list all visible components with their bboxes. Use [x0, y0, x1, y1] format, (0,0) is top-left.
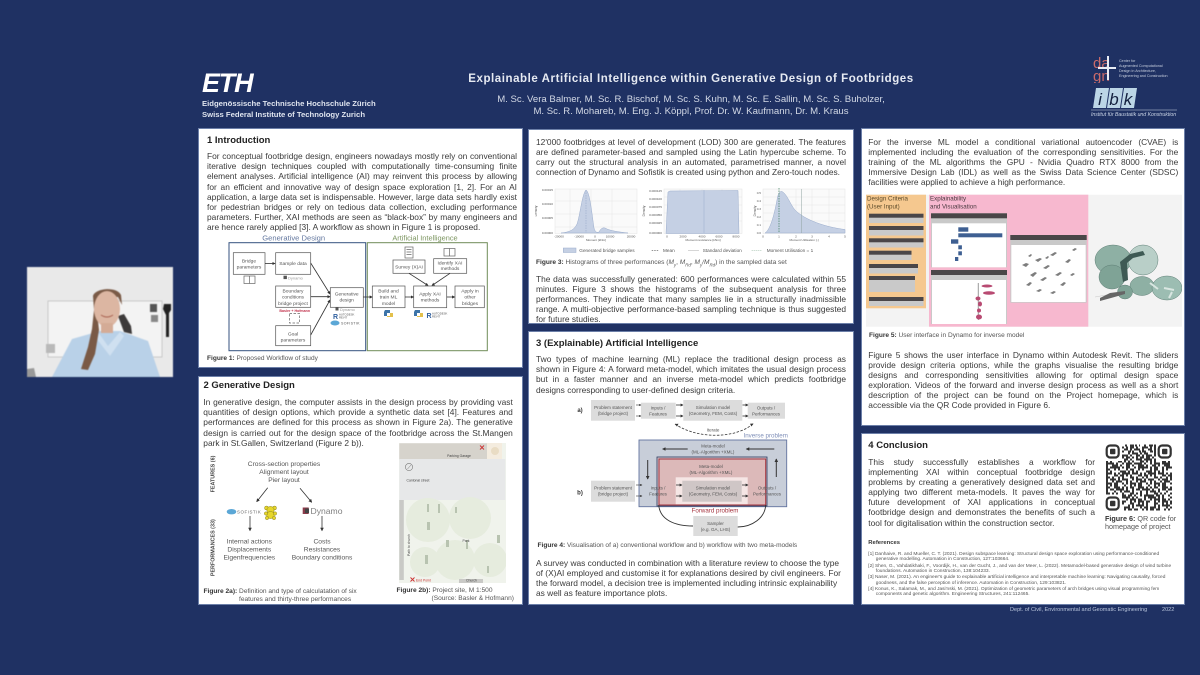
text: conclusion body	[868, 457, 1096, 528]
figure 4: conventional workflow and two meta-model workflow: (ML-Algorithm +XML)	[690, 470, 733, 475]
figure 4: conventional workflow and two meta-model workflow: Features	[649, 492, 668, 496]
text: user interface description: designs and corresponding sensitivities allowing for optimal design space	[868, 370, 1178, 380]
webcam video of presenter	[26, 266, 174, 378]
figure 1: proposed workflow diagram: REVIT	[432, 314, 441, 318]
figure 4: conventional workflow and two meta-model workflow: Problem statement	[594, 405, 633, 410]
figure 3: three performance histograms: Generated bridge samples	[579, 248, 635, 253]
figure 1: proposed workflow diagram: bridges	[462, 301, 479, 307]
figure 2a: features and performances diagram: Alignment layout	[259, 469, 309, 476]
figure 2b: project site map	[399, 443, 506, 583]
caption: figure 6: homepage of project	[1105, 522, 1171, 531]
figure 3: three performance histograms: Moment Utilisation = 1	[767, 248, 814, 253]
caption: figure 2a	[204, 588, 357, 602]
figure 3: three performance histograms: 0	[666, 234, 668, 238]
header: ETH logo: Eidgenössische Technische Hochschule Zürich	[202, 99, 376, 108]
figure 3: three performance histograms: 0.000125	[649, 189, 662, 193]
figure 2a: features and performances diagram: Cross-section properties	[248, 461, 321, 468]
figure 2a: features and performances diagram: Internal actions	[227, 538, 273, 546]
figure 3: three performance histograms: 20000	[627, 234, 636, 238]
text: inverse model	[868, 137, 1178, 187]
figure 4: conventional workflow and two meta-model workflow: Inverse problem	[744, 432, 788, 440]
figure 1: proposed workflow diagram: Generative Design	[262, 234, 325, 242]
figure 3: three performance histograms: 0	[762, 234, 764, 238]
panel: design criteria sliders: (User Input)	[867, 204, 900, 210]
heading: conclusion: 4 Conclusion	[868, 440, 928, 450]
figure 2a: features and performances diagram: Dynamo	[310, 506, 343, 516]
text: introduction body: are hence rarely applied [3]. A workflow as shown in Figure 1 is proposed.	[207, 222, 480, 232]
text: data generation intro: carry out the structural analysis in an automated, parametrised manner, a novel	[536, 157, 846, 167]
figure 4: conventional workflow and two meta-model workflow	[577, 400, 788, 536]
figure 3: three performance histograms: 0.00010	[542, 202, 553, 206]
figure 1: proposed workflow diagram: Build and	[378, 288, 399, 294]
figure 1: proposed workflow diagram: train ML	[380, 294, 398, 300]
figure 4: conventional workflow and two meta-model workflow: Inputs /	[651, 406, 666, 410]
references: foundations. Automation in Construction, 138:104233.	[876, 569, 990, 574]
text: generative design body: In generative design, the computer assists in the design process by providing vast	[203, 397, 513, 407]
figure 1: proposed workflow diagram: parameters	[281, 338, 306, 344]
text: explainable AI body: designs corresponding to user-defined design criteria.	[536, 385, 735, 395]
figure 3: three performance histograms: 10000	[606, 234, 615, 238]
figure 1: proposed workflow diagram: Identify XAI	[437, 260, 463, 266]
text: survey and decision tree	[536, 558, 841, 598]
figure 4: conventional workflow and two meta-model workflow: Outputs /	[758, 486, 777, 490]
figure 1: proposed workflow diagram: Goal	[288, 332, 298, 338]
header: ETH logo: Swiss Federal Institute of Technology Zurich	[202, 110, 365, 119]
figure 4: conventional workflow and two meta-model workflow: Forward problem	[692, 508, 738, 514]
figure 2b: project site map: Path to church	[407, 534, 411, 556]
figure 3: three performance histograms	[535, 188, 846, 253]
text: data generation results: The data was successfully generated: 600 performances were calculated within 55	[536, 274, 846, 284]
figure 1: proposed workflow diagram: other	[464, 294, 476, 300]
logo: DACS centre: Center for	[1119, 59, 1135, 63]
text: user interface description: exploration. Videos of the forward and inverse design process as well as a short	[868, 380, 1178, 390]
panel: inverse model and user interface	[862, 129, 1184, 425]
panel: design criteria sliders	[866, 195, 926, 308]
text: conclusion body: applying two different meta-models. It paves the way for	[868, 487, 1095, 497]
text: survey and decision tree: the forward model, a decision tree is implemented including intrinsic explainability	[536, 578, 837, 588]
text: introduction body	[207, 151, 517, 232]
figure 3: three performance histograms: 0.2	[757, 215, 761, 219]
caption: figure 2b: (Source: Basler & Hofmann)	[432, 594, 514, 602]
figure 4: conventional workflow and two meta-model workflow: Outputs /	[757, 406, 776, 410]
text: introduction body: application, a large data set is indispensable. However, large data sets hardly exist	[207, 192, 517, 202]
caption: figure 2b: Figure 2b): Project site, M 1:500	[396, 586, 493, 594]
logo: DACS centre: da	[1093, 55, 1110, 72]
text: data generation intro	[536, 137, 846, 177]
figure 2a: features and performances diagram: Boundary conditions	[292, 554, 353, 562]
panel: design criteria sliders: Design Criteria	[867, 196, 908, 202]
references: [3] Naser, M. (2021). An engineer's guide to explainable artificial intelligence and interpretable machine learning: Navigating causality, forced	[868, 575, 1165, 580]
figure 5: Dynamo user interface	[866, 194, 1182, 327]
figure 3: three performance histograms: Moment [kNm]	[586, 238, 606, 242]
text: generative design body: quantities of design options, which provide a synthetic data set [4]. Features and	[203, 407, 513, 417]
logo: DACS centre	[1093, 55, 1168, 83]
text: conclusion body: footbridge design and demonstrates the benefits of such a	[868, 507, 1095, 517]
panel: explainability and visualisation: and Visualisation	[930, 204, 977, 210]
figure 1: proposed workflow diagram: Boundary	[283, 288, 304, 294]
text: data generation results: for future studies.	[536, 314, 601, 324]
logo: DACS centre: Design in Architecture,	[1119, 69, 1156, 73]
references: components and genetic algorithm. Engineering Structures, 241:112465.	[876, 592, 1030, 597]
panel: introduction	[199, 129, 522, 367]
figure 1: proposed workflow diagram: AUTODESK	[432, 312, 447, 316]
text: introduction body: for an efficient and innovative way of design space exploration [1, 2]. For an AI	[207, 182, 517, 192]
text: survey and decision tree: as well as feature importance plots.	[536, 588, 667, 598]
references: [2] Shen, G., Vahdatikhaki, F., Voordijk, H., van der Gucht, J., and van der Meer, L. (2022). Metamodel-based generative design of wind turbine	[868, 564, 1171, 568]
figure 4: conventional workflow and two meta-model workflow: Performances	[752, 412, 781, 416]
text: conclusion body: This study successfully establishes a workflow for	[868, 457, 1095, 467]
panel: generative design	[199, 377, 522, 604]
figure 4: conventional workflow and two meta-model workflow: Problem statement	[594, 486, 633, 490]
logo: DACS centre: Augmented Computational	[1119, 64, 1163, 68]
text: inverse model: facilities were applied to achieve a high performance.	[868, 177, 1065, 187]
text: conclusion body: implementing XAI within conceptual footbridge design	[868, 467, 1095, 477]
text: user interface description: accessible via the QR Code provided in Figure 6.	[868, 400, 1050, 410]
caption: figure 3: Figure 3: Histograms of three performances (My, MRd, My/MRd) in the sampled data set	[536, 259, 787, 268]
text: data generation intro: 12'000 footbridges at level of development (LOD) 300 are generated. The features	[536, 137, 846, 147]
text: conclusion body: future development of XAI applications in conceptual	[868, 497, 1095, 507]
caption: figure 6	[1105, 514, 1176, 531]
figure 3: three performance histograms: 6000	[716, 234, 723, 238]
figure 4: conventional workflow and two meta-model workflow: (bridge project)	[598, 411, 629, 416]
figure 2b: project site map: End Point	[416, 578, 431, 582]
caption: figure 4: Figure 4: Visualisation of a) conventional workflow and b) workflow with two meta-models	[538, 542, 797, 549]
figure 3: three performance histograms: Moment Utilisation [-]	[789, 238, 819, 242]
figure 2b: project site map: Cantonal street	[406, 478, 430, 482]
figure 4: conventional workflow and two meta-model workflow: (Geometry, FEM, Costs)	[689, 492, 738, 496]
figure 3: three performance histograms: -10000	[574, 234, 584, 238]
figure 3: three performance histograms: 3	[811, 234, 813, 238]
figure 3: three performance histograms: -20000	[554, 234, 564, 238]
figure 2a: features and performances diagram: SOFISTIK	[237, 510, 261, 514]
header: ETH logo: ETH	[202, 68, 252, 98]
text: conclusion body: tool for digitalisation within the construction sector.	[868, 518, 1055, 528]
text: data generation intro: connection of Dynamo and Sofistik is created using python and Zero-touch nodes.	[536, 167, 840, 177]
figure 3: three performance histograms: 0.00000	[542, 231, 553, 235]
figure 1: proposed workflow diagram: Survey (X)AI	[395, 264, 423, 270]
text: introduction body: iterative design techniques coupled with computationally time-consuming finite	[207, 161, 517, 171]
figure 1: proposed workflow diagram: Apply in	[461, 288, 479, 294]
figure 3: three performance histograms: 0.000075	[649, 205, 662, 209]
figure 4: conventional workflow and two meta-model workflow: (Geometry, FEM, Costs)	[689, 411, 738, 416]
text: inverse model: implemented including the evaluation of the corresponding sensitivities. For the	[868, 147, 1178, 157]
caption: figure 1: Figure 1: Proposed Workflow of study	[207, 355, 318, 362]
figure 2b: project site map: Park	[463, 539, 470, 543]
figure 3: three performance histograms: Density	[753, 205, 757, 216]
references: generative modelling. Automation in Construction, 127:103664.	[876, 557, 1009, 562]
figure 4: conventional workflow and two meta-model workflow: Inputs /	[651, 486, 666, 490]
figure 2a: features and performances diagram: Pier layout	[268, 477, 300, 484]
figure 4: conventional workflow and two meta-model workflow: Iterate	[707, 428, 720, 432]
figure 1: proposed workflow diagram: SOFISTIK	[341, 321, 360, 325]
figure 3: three performance histograms: 0.000050	[649, 213, 662, 217]
figure 2a: features and performances diagram: Resistances	[304, 546, 341, 554]
figure 3: three performance histograms: 8000	[733, 234, 740, 238]
figure 2a: features and performances diagram: Displacements	[227, 546, 272, 554]
text: data generation results: range. A multi-objective performance-based sampling technique is thus suggested	[536, 304, 846, 314]
text: user interface description: provide design criteria options, while the graphs visualise the resulting bridge	[868, 360, 1178, 370]
figure 2b: project site map: Parking Garage	[447, 454, 471, 458]
figure 1: proposed workflow diagram: methods	[441, 266, 460, 272]
3D footbridge model	[1095, 245, 1182, 301]
figure 1: proposed workflow diagram: Sample data	[279, 261, 307, 267]
figure 4: conventional workflow and two meta-model workflow: Performances	[753, 492, 782, 496]
logo: ibk institute: k	[1124, 90, 1134, 109]
text: introduction body: for pedestrian bridges or rely on tedious data collection, excluding performance	[207, 202, 517, 212]
figure 2a: features and performances diagram: PERFORMANCES (33)	[210, 519, 216, 576]
figure 2a: features and performances diagram: Costs	[313, 538, 331, 546]
figure 2b: project site map: Church	[466, 578, 477, 582]
figure 3: three performance histograms: 2000	[680, 234, 687, 238]
figure 1: proposed workflow diagram: Bridge	[242, 258, 256, 264]
figure 6: QR code	[1106, 444, 1172, 511]
text: inverse model: For the inverse ML model a conditional variational autoencoder (CVAE) is	[868, 137, 1178, 147]
figure 4: conventional workflow and two meta-model workflow: Simulation model	[696, 486, 730, 490]
panel: data generation and histograms	[529, 130, 853, 323]
figure 3: three performance histograms: Standard deviation	[703, 248, 742, 253]
figure 1: proposed workflow diagram: conditions	[282, 294, 305, 300]
authors: M. Sc. Vera Balmer, M. Sc. R. Bischof, M. Sc. S. Kuhn, M. Sc. E. Sallin, M. Sc. S. Buholzer,	[497, 94, 885, 105]
caption: figure 2a: Figure 2a): Definition and type of calculatation of six	[204, 588, 357, 594]
header: ETH logo	[202, 68, 376, 119]
figure 1: proposed workflow diagram: Dynamo	[340, 307, 356, 312]
references: [1] Danhaive, R. and Mueller, C. T. (2021). Design subspace learning: Structural design space exploration using performance-conditioned	[868, 552, 1159, 556]
caption: figure 2a: features and thirty-three performances	[239, 596, 351, 602]
text: explainable AI body	[536, 354, 846, 395]
figure 1: proposed workflow diagram: methods	[421, 298, 440, 304]
title: Explainable Artificial Intelligence within Generative Design of Footbridges	[468, 72, 914, 84]
figure 1: proposed workflow diagram: bridge project	[278, 301, 308, 307]
text: explainable AI body: Two types of machine learning (ML) replace the traditional design process as	[536, 354, 846, 364]
text: generative design body: park in St.Gallen, Switzerland (Figure 2 b)).	[203, 438, 364, 448]
caption: figure 6: Figure 6: QR code for	[1105, 514, 1176, 523]
figure 3: three performance histograms: 0.4	[757, 199, 761, 203]
logo: ibk institute: Institut für Baustatik und Konstruktion	[1091, 112, 1176, 118]
text: explainable AI body: shown in Figure 4: A forward meta-model, which imitates the usual design process	[536, 364, 846, 374]
figure 3: three performance histograms: 0.000025	[649, 221, 662, 225]
panel: explainability and visualisation	[929, 195, 1088, 327]
figure 3: three performance histograms: 0.3	[757, 207, 761, 211]
text: data generation results: performances. They indicate that many samples lie in a structurally inadmissible	[536, 294, 846, 304]
references: [4] Konus, K., Salamak, M., and Jasi'nski, M. (2021). Optimization of geometric parameters of arch bridges using visual programming fem	[868, 587, 1159, 592]
text: data generation results: minutes. Figure 3 shows the histograms of the subsequent analysis for three	[536, 284, 846, 294]
figure 4: conventional workflow and two meta-model workflow: (bridge project)	[598, 492, 629, 496]
figure 1: proposed workflow diagram: R	[426, 313, 432, 320]
authors	[497, 94, 885, 117]
text: generative design body: performances are defined for this process as shown in Figure 2a). The generative	[203, 417, 513, 427]
heading: explainable AI: 3 (Explainable) Artificial Intelligence	[536, 338, 698, 348]
text: survey and decision tree: of (X)AI employed and customise it for explanations desired by civil engineers. For	[536, 568, 841, 578]
panel: explainable artificial intelligence	[529, 332, 853, 604]
text: introduction body: For conceptual footbridge design, engineers nowadays mostly rely on conventional	[207, 151, 517, 161]
caption: figure 2b	[396, 586, 514, 602]
figure 1: proposed workflow diagram: AUTODESK	[339, 312, 354, 316]
footer: department and year: 2022	[1162, 606, 1174, 612]
logo: DACS centre: Engineering and Construction	[1119, 74, 1168, 78]
figure 4: conventional workflow and two meta-model workflow: (ML-Algorithm +XML)	[692, 450, 735, 454]
figure 3: three performance histograms: 1	[778, 234, 780, 238]
figure 3: three performance histograms: 0.1	[757, 223, 761, 227]
figure 1: proposed workflow diagram: Apply XAI	[419, 292, 441, 298]
figure 3: three performance histograms: 0.0	[757, 231, 761, 235]
text: data generation results	[536, 274, 846, 324]
panel: conclusion	[862, 434, 1184, 604]
figure 1: proposed workflow diagram: REVIT	[339, 316, 348, 320]
text: conclusion body: problems by creating a generatively designed data set and	[868, 477, 1095, 487]
figure 3: three performance histograms: Density	[642, 205, 646, 216]
text: inverse model: training of the ML algorithms the GPU - Nvidia Quadro RTX 8000 from the	[868, 157, 1178, 167]
text: user interface description: description of the project can be found on the Project homepage, which is	[868, 390, 1178, 400]
figure 3: three performance histograms: 0.00015	[542, 188, 553, 192]
figure 4: conventional workflow and two meta-model workflow: b)	[577, 490, 583, 496]
panel: explainability and visualisation: Explainability	[930, 196, 967, 202]
heading: introduction: 1 Introduction	[207, 134, 270, 146]
figure 4: conventional workflow and two meta-model workflow: Meta-model	[701, 444, 725, 448]
text: data generation intro: are defined parameter-based and sampled using the Latin hypercube scheme. To	[536, 147, 846, 157]
figure 4: conventional workflow and two meta-model workflow: (e.g. GA, LHS)	[701, 527, 731, 532]
references: References	[868, 540, 900, 546]
figure 3: three performance histograms: 0.00005	[542, 216, 553, 220]
figure 1: proposed workflow diagram: Artificial Intelligence	[392, 234, 458, 242]
text: introduction body: element analyses. Artificial intelligence (AI) may reinvent this process by allowing	[207, 171, 517, 181]
figure 4: conventional workflow and two meta-model workflow: Simulation model	[696, 405, 730, 410]
figure 4: conventional workflow and two meta-model workflow: a)	[577, 408, 583, 414]
logo: ibk institute: i	[1098, 90, 1103, 109]
figure 3: three performance histograms: 0	[594, 234, 596, 238]
figure 3: three performance histograms: 0.000100	[649, 197, 662, 201]
figure 3: three performance histograms: 4	[828, 234, 830, 238]
figure 3: three performance histograms: Mean	[663, 248, 675, 253]
text: explainable AI body: but in a faster manner and an inverse meta-model which predicts footbridge	[536, 374, 846, 384]
figure 3: three performance histograms: 0.000000	[649, 231, 662, 235]
heading: generative design: 2 Generative Design	[204, 380, 295, 390]
text: introduction body: parameters. Further, XAI methods are seen as “black-box” by many engineers and	[207, 212, 517, 222]
figure 1: proposed workflow diagram	[228, 234, 488, 352]
figure 2a: features and performances diagram: Eigenfrequencies	[223, 554, 276, 562]
references	[868, 540, 1171, 597]
text: generative design body	[203, 397, 513, 448]
authors: M. Sc. R. Mohareb, M. Eng. J. Köppl, Prof. Dr. W. Kaufmann, Dr. M. Kraus	[533, 106, 849, 117]
figure 4: conventional workflow and two meta-model workflow: Meta-model	[699, 464, 723, 469]
footer: department and year: Dept. of Civil, Environmental and Geomatic Engineering	[1010, 606, 1147, 612]
figure 3: three performance histograms: 4000	[699, 234, 706, 238]
figure 3: three performance histograms: 2	[795, 234, 797, 238]
figure 3: three performance histograms: 5	[844, 234, 846, 238]
figure 1: proposed workflow diagram: Generative	[335, 292, 359, 298]
logo: ibk institute	[1091, 88, 1177, 118]
figure 1: proposed workflow diagram: parameters	[237, 264, 262, 270]
figure 4: conventional workflow and two meta-model workflow: Features	[649, 412, 668, 416]
figure 1: proposed workflow diagram: model	[382, 301, 395, 307]
figure 2a: features and performances diagram: FEATURES (6)	[210, 455, 216, 492]
figure 4: conventional workflow and two meta-model workflow: Sampler	[707, 521, 724, 526]
logo: ibk institute: b	[1109, 90, 1119, 109]
text: user interface description: Figure 5 shows the user interface in Dynamo within Autodesk Revit. The sliders	[868, 350, 1178, 360]
text: survey and decision tree: A survey was conducted in combination with a literature review to choose the type	[536, 558, 839, 568]
figure 1: proposed workflow diagram: Dynamo	[288, 275, 304, 280]
figure 3: three performance histograms: 0.5	[757, 191, 761, 195]
caption: figure 5: Figure 5: User interface in Dynamo for inverse model	[869, 332, 1024, 339]
text: inverse model: Immersive Design Lab (IDL) as well as the Swiss Data Science Center (SDSC)	[868, 167, 1178, 177]
figure 1: proposed workflow diagram: design	[339, 298, 354, 304]
text: generative design body: design is carried out for the design space of the footbridge across the St.Mangen	[203, 428, 513, 438]
figure 2a: features and performances diagram	[210, 455, 353, 576]
figure 1: proposed workflow diagram: Basler + Hofmann	[279, 309, 310, 313]
figure 3: three performance histograms: Moment resistance [kNm]	[685, 238, 721, 242]
references: goodness, and the false perception of inference. Automation in Construction, 129:103821.	[876, 580, 1066, 586]
figure 1: proposed workflow diagram: R	[333, 314, 338, 321]
text: user interface description	[868, 350, 1178, 410]
